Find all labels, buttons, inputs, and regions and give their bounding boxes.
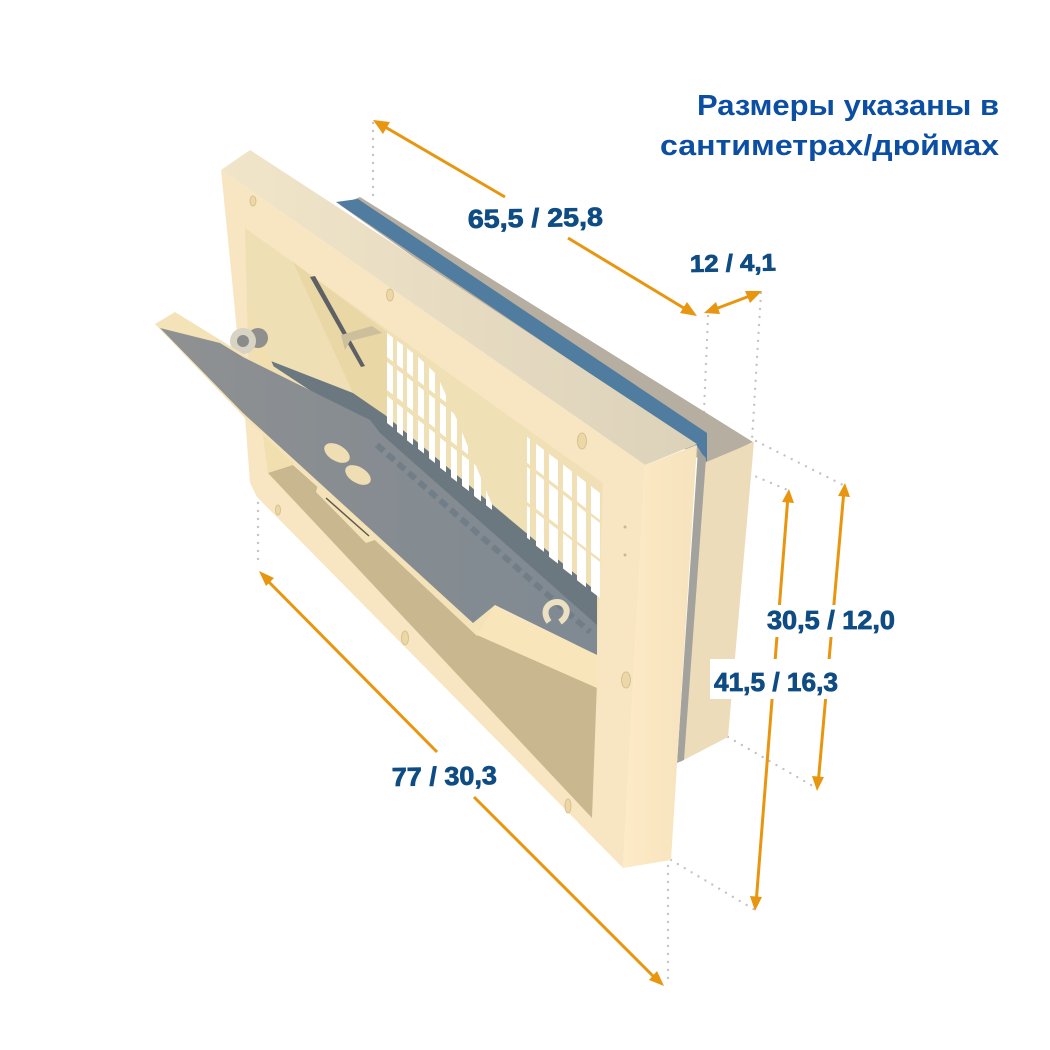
flap rim — [155, 312, 497, 636]
label: 41,5 / 16,3: 41,5 / 16,3 — [714, 667, 838, 697]
label: 30,5 / 12,0: 30,5 / 12,0 — [767, 605, 895, 635]
flap surface — [160, 328, 597, 655]
back housing — [336, 197, 754, 763]
screw holes — [250, 196, 630, 813]
arrow: height 41,5 — [750, 489, 794, 911]
knob 1 — [321, 439, 353, 467]
left grille — [387, 333, 492, 510]
label background 30,5 — [765, 605, 898, 637]
note: units heading: сантиметрах/дюймах — [660, 130, 999, 162]
label: 65,5 / 25,8: 65,5 / 25,8 — [468, 202, 603, 234]
label: 12 / 4,1: 12 / 4,1 — [690, 250, 776, 278]
label background 41,5 — [710, 659, 838, 699]
hinge right — [546, 602, 567, 622]
louvers — [377, 445, 590, 632]
back wall — [245, 228, 603, 660]
frame front face — [221, 170, 645, 868]
note: units heading — [660, 90, 999, 162]
arrow: height 30,5 — [812, 483, 850, 791]
label: 77 / 30,3: 77 / 30,3 — [392, 760, 497, 792]
vent product illustration — [155, 150, 754, 868]
frame side face — [623, 445, 697, 868]
right grille — [527, 437, 600, 598]
hinge left — [230, 328, 268, 354]
knob 2 — [342, 461, 374, 489]
flap shadow on wall — [258, 356, 597, 640]
arrow: width 12 — [704, 291, 762, 314]
flap — [155, 312, 597, 688]
note: units heading: Размеры указаны в — [697, 90, 999, 122]
wall bracket — [341, 326, 382, 350]
floor left light part — [246, 300, 300, 473]
latch — [316, 484, 375, 543]
arrow: depth 65,5 — [373, 120, 697, 316]
wall slot — [310, 276, 365, 367]
frame top face — [221, 150, 697, 465]
floor — [268, 465, 597, 818]
arrow: length 77 — [259, 571, 664, 986]
flap end lip — [477, 605, 597, 688]
upper wall shading — [293, 262, 387, 420]
dotted guide lines — [258, 123, 845, 986]
opening interior — [245, 228, 603, 818]
